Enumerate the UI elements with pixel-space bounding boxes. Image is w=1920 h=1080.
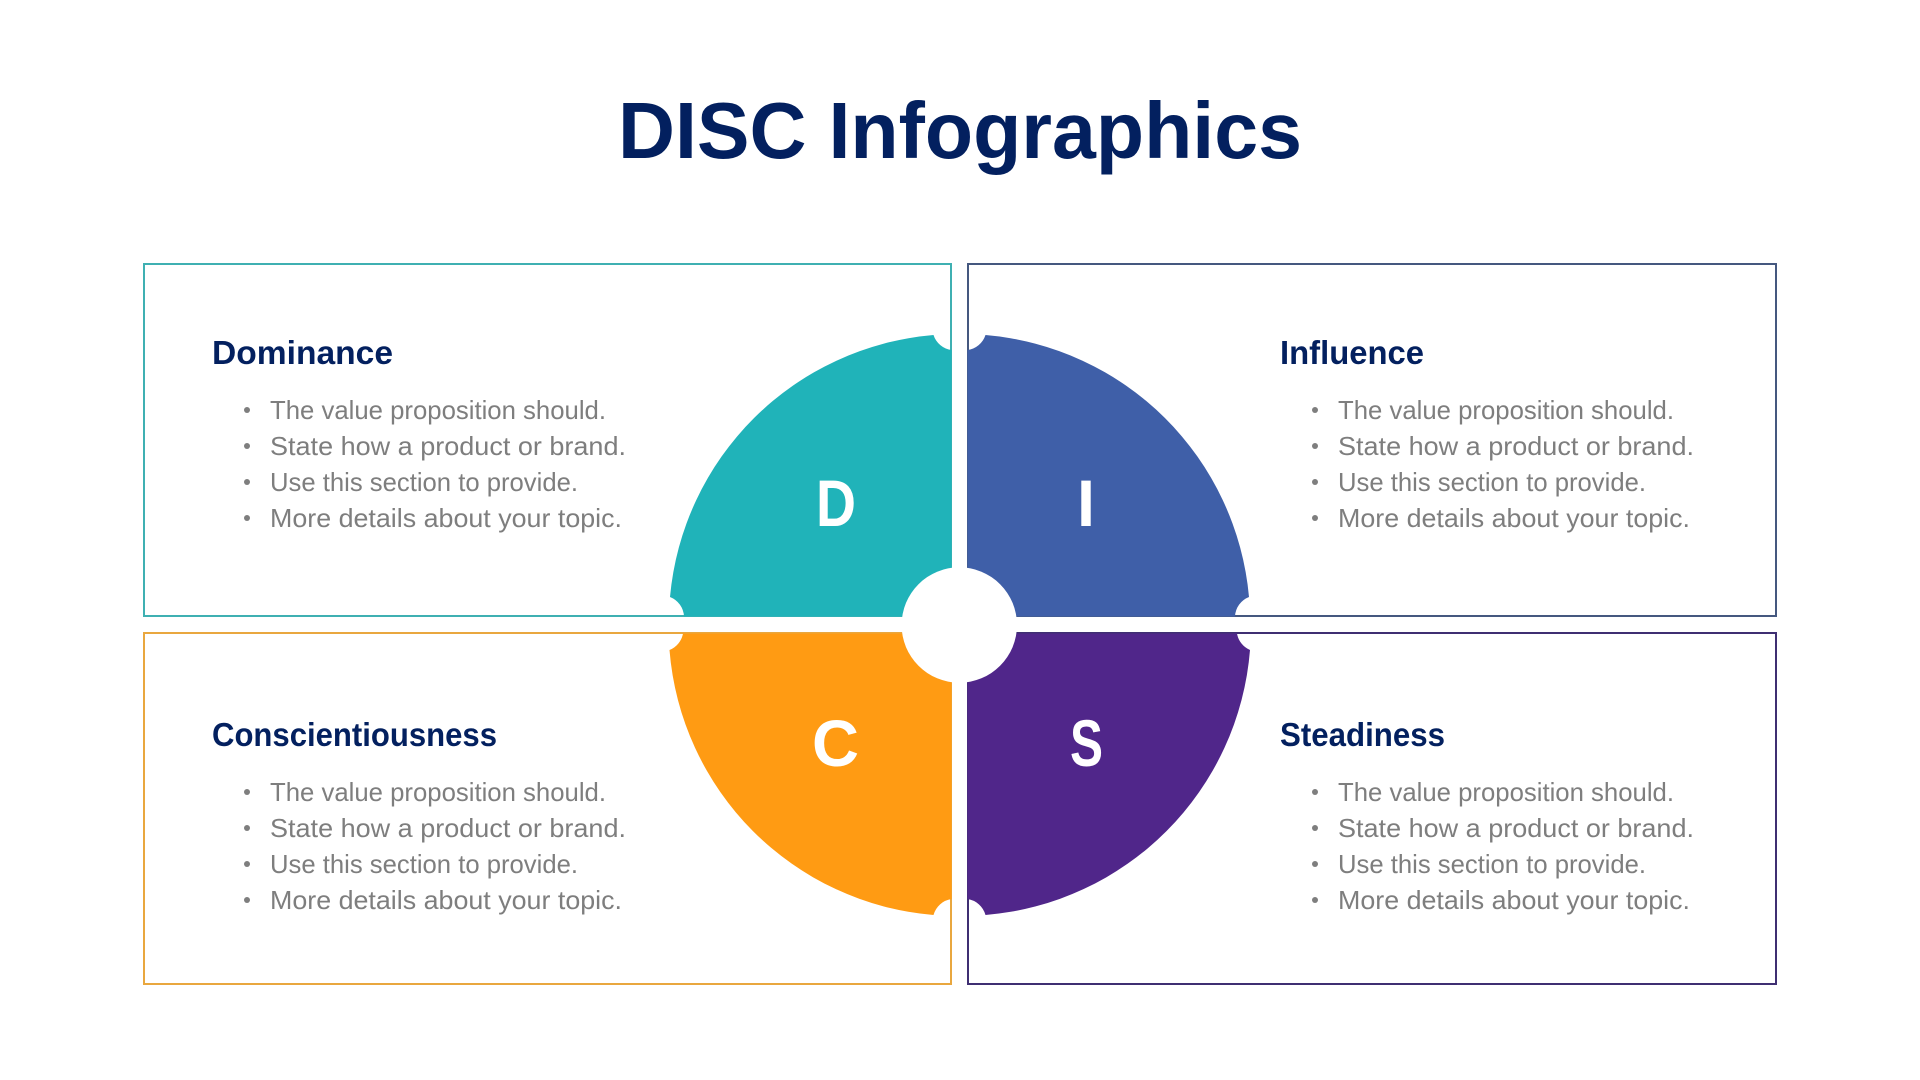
- bullet list: conscientiousness: [244, 777, 626, 915]
- wedge: C: [670, 634, 952, 915]
- bullet list: conscientiousness: State how a product or brand.: [270, 813, 626, 843]
- bullet list: steadiness: [1312, 777, 1694, 915]
- wedge: I: [968, 335, 1249, 616]
- bullet list: conscientiousness: More details about your topic.: [270, 885, 622, 915]
- bullet list: steadiness: The value proposition should.: [1338, 777, 1674, 807]
- wedge: S: [968, 634, 1250, 915]
- bullet list: influence: Use this section to provide.: [1338, 467, 1646, 497]
- center hole: [902, 567, 1017, 683]
- wedge: D: D: [816, 466, 856, 540]
- bullet list: steadiness: Use this section to provide.: [1338, 849, 1646, 879]
- panel: conscientiousness: [144, 633, 951, 984]
- bullet list: influence: More details about your topic.: [1338, 503, 1690, 533]
- bullet list: conscientiousness: Use this section to provide.: [270, 849, 578, 879]
- wedge: S: S: [1070, 706, 1103, 780]
- wedge: I: I: [1077, 466, 1095, 540]
- wedge: C: C: [812, 706, 859, 780]
- bullet list: dominance: State how a product or brand.: [270, 431, 626, 461]
- title: DISC Infographics: [618, 86, 1302, 175]
- bullet list: dominance: More details about your topic.: [270, 503, 622, 533]
- bullet list: steadiness: State how a product or brand.: [1338, 813, 1694, 843]
- bullet list: dominance: The value proposition should.: [270, 395, 606, 425]
- bullet list: dominance: [244, 395, 626, 533]
- panel: influence: [968, 264, 1776, 616]
- bullet list: influence: The value proposition should.: [1338, 395, 1674, 425]
- panel: dominance: [144, 264, 951, 616]
- bullet list: influence: State how a product or brand.: [1338, 431, 1694, 461]
- bullet list: steadiness: More details about your topic.: [1338, 885, 1690, 915]
- heading: steadiness: Steadiness: [1280, 716, 1445, 753]
- heading: dominance: Dominance: [212, 334, 393, 371]
- heading: conscientiousness: Conscientiousness: [212, 716, 497, 753]
- panel: steadiness: [968, 633, 1776, 984]
- bullet list: influence: [1312, 395, 1694, 533]
- bullet list: dominance: Use this section to provide.: [270, 467, 578, 497]
- heading: influence: Influence: [1280, 334, 1424, 371]
- bullet list: conscientiousness: The value proposition should.: [270, 777, 606, 807]
- wedge: D: [670, 335, 952, 616]
